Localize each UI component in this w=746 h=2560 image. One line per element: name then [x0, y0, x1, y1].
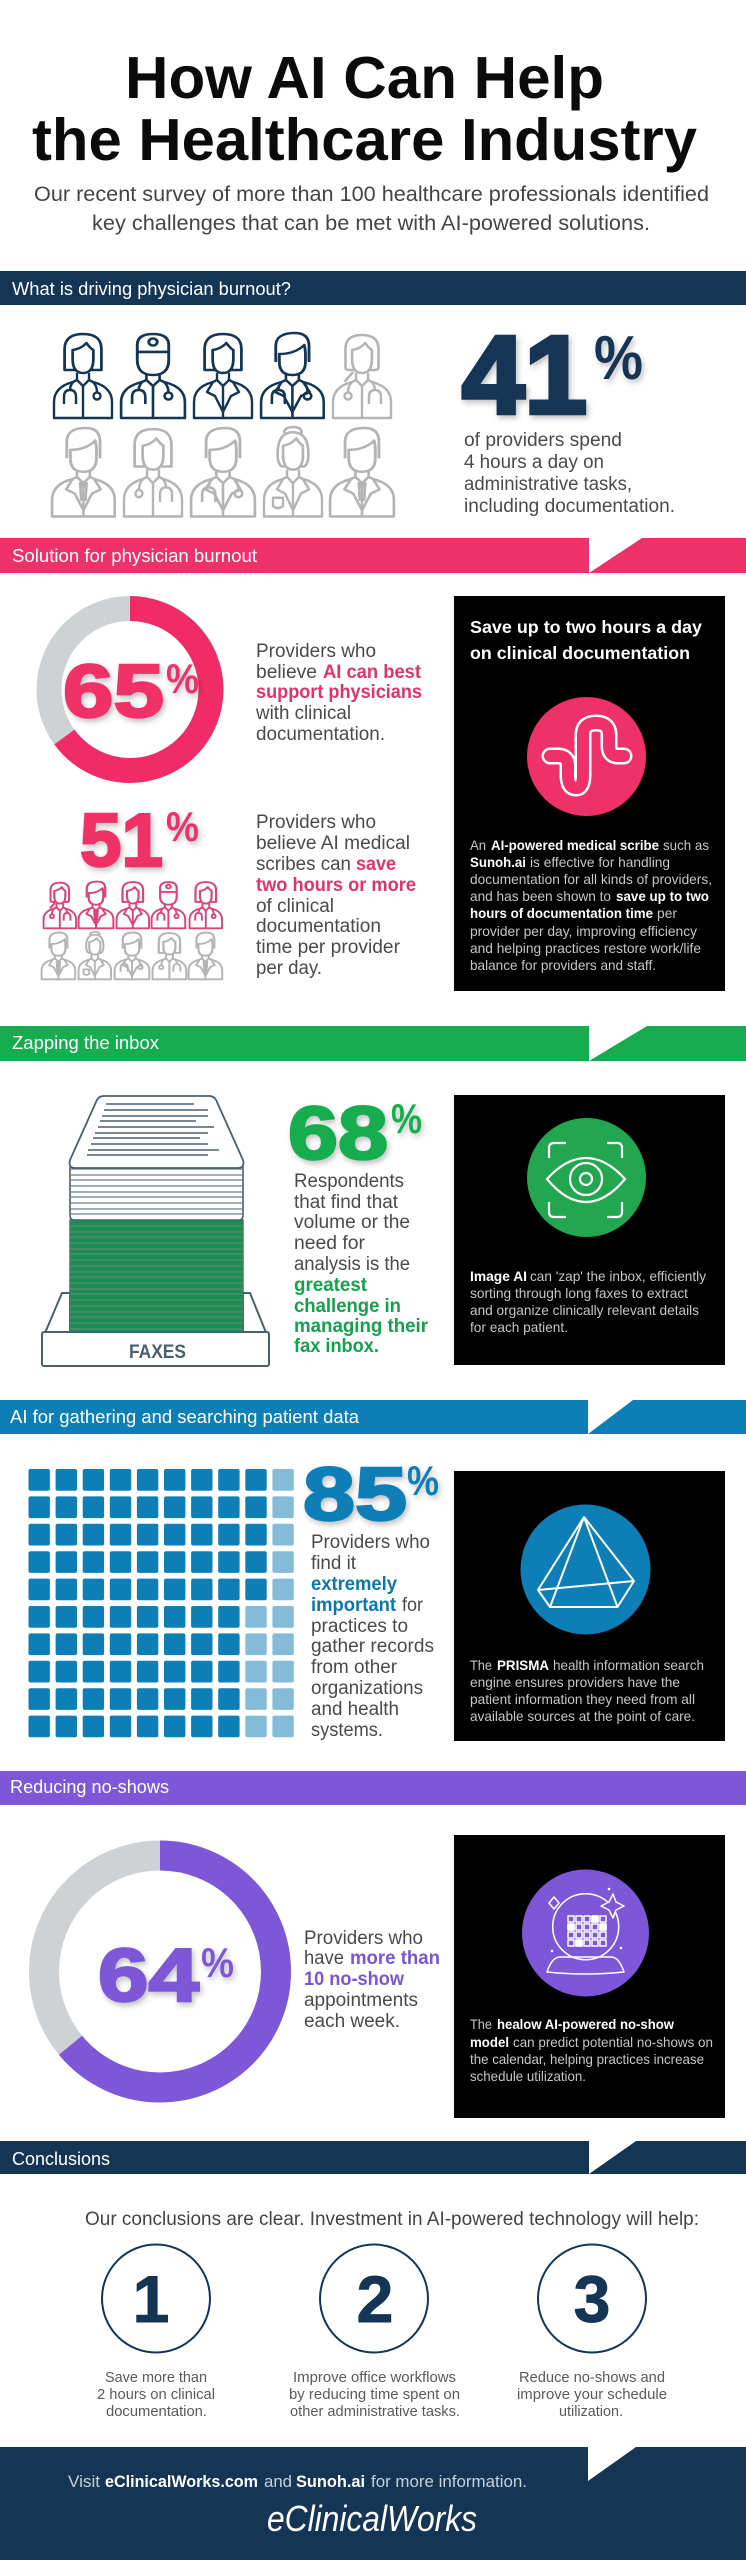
footer: [0, 2447, 746, 2560]
text: 65% description: [255, 641, 422, 745]
text: 85% description: from other: [311, 1657, 398, 1678]
callout body text: is effective for handling: [530, 855, 670, 870]
heading band: zapping: [0, 1026, 746, 1061]
stat: 64%: [98, 1933, 234, 2017]
heading band: burnout: [0, 271, 746, 305]
callout body text: model: [470, 2035, 509, 2050]
icon: Sunoh wave: [527, 697, 646, 816]
text: 85% description: extremely: [311, 1574, 397, 1595]
stat: 64%: 64: [98, 1933, 199, 2017]
text: 51% description: per day.: [256, 958, 322, 979]
panel: gathering and searching patient data: [0, 1400, 746, 1741]
text: 51% description: time per provider: [256, 937, 401, 958]
donut chart: 65%: [49, 608, 211, 770]
stat: 51%: %: [166, 803, 199, 850]
label: FAXES: FAXES: [129, 1342, 186, 1363]
stat: 85%: 85: [303, 1452, 407, 1536]
callout body text: An: [470, 838, 486, 853]
text: 85% description: find it: [311, 1553, 357, 1574]
title: [32, 45, 697, 173]
callout heading: [470, 617, 702, 663]
text: 85% description: important: [311, 1595, 397, 1616]
footer link text: for more information.: [371, 2472, 527, 2491]
panel: conclusions: [0, 2141, 746, 2420]
title: How AI Can Help: [125, 45, 604, 111]
item 3: reduce no-shows: utilization.: [559, 2404, 623, 2420]
text: 65% description: believe: [256, 662, 317, 683]
callout body text: [470, 2017, 713, 2084]
callout body text: for each patient.: [470, 1320, 568, 1335]
text: 51% description: documentation: [256, 916, 381, 937]
text: 41% description: of providers spend: [464, 430, 622, 451]
subtitle: Our recent survey of more than 100 healthcare professionals identified: [34, 182, 709, 206]
panel: solution for burnout: [0, 538, 746, 991]
stat: 64%: %: [201, 1939, 234, 1986]
text: 64% description: [304, 1928, 440, 2032]
callout body text: Sunoh.ai: [470, 855, 526, 870]
stat: 68%: %: [391, 1095, 422, 1142]
heading band: patient data: AI for gathering and searching patient data: [10, 1407, 360, 1427]
text: 41% description: 4 hours a day on: [464, 452, 604, 473]
text: 41% description: [464, 430, 675, 517]
callout body text: per: [657, 906, 677, 921]
text: 68% description: managing their: [294, 1316, 429, 1337]
item 1: save time: Save more than: [105, 2370, 207, 2386]
icon: grid of ten physicians, four highlighted: [52, 333, 394, 516]
text: 64% description: each week.: [304, 2011, 400, 2032]
callout body text: can 'zap' the inbox, efficiently: [530, 1269, 706, 1284]
donut chart: 64%: [44, 1856, 276, 2088]
callout body text: documentation for all kinds of providers,: [470, 872, 712, 887]
item 3: reduce no-shows: Reduce no-shows and: [519, 2370, 665, 2386]
callout body text: such as: [663, 838, 709, 853]
footer link text: Visit: [68, 2472, 100, 2491]
text: 51% description: [256, 812, 416, 979]
heading band: no-shows: Reducing no-shows: [10, 1777, 169, 1797]
panel: reducing no-shows: [0, 1771, 746, 2118]
callout body text: engine ensures providers have the: [470, 1675, 680, 1690]
callout body text: The: [470, 1658, 492, 1673]
text: 85% description: systems.: [311, 1720, 383, 1741]
text: 68% description: volume or the: [294, 1212, 410, 1233]
stat: 41%: [462, 314, 643, 437]
callout body text: can predict potential no-shows on: [513, 2035, 713, 2050]
text: 65% description: AI can best: [323, 662, 422, 683]
title: the Healthcare Industry: [32, 107, 697, 173]
panel: black callout, PRISMA: [454, 1471, 725, 1741]
callout body text: [470, 1658, 704, 1724]
text: 85% description: gather records: [311, 1636, 434, 1657]
text: 51% description: of clinical: [256, 896, 334, 917]
text: 68% description: need for: [294, 1233, 366, 1254]
callout body text: and has been shown to: [470, 889, 611, 904]
stat: 68%: [288, 1091, 422, 1175]
text: 68% description: analysis is the: [294, 1254, 410, 1275]
callout body text: sorting through long faxes to extract: [470, 1286, 688, 1301]
panel: black callout, Image AI: [454, 1095, 725, 1365]
footer link text: Sunoh.ai: [296, 2472, 365, 2491]
callout heading: Save up to two hours a day: [470, 617, 702, 637]
callout body text: The: [470, 2017, 492, 2032]
heading band: patient data: [0, 1400, 746, 1434]
footer link text: eClinicalWorks.com: [105, 2472, 258, 2491]
panel: black callout, healow: [454, 1835, 725, 2118]
item 3: reduce no-shows: [517, 2244, 667, 2420]
callout body text: provider per day, improving efficiency: [470, 924, 697, 939]
logo: eClinicalWorks: eClinicalWorks: [267, 2498, 477, 2539]
heading band: zapping: Zapping the inbox: [12, 1033, 159, 1053]
stat: 65%: 65: [63, 649, 164, 733]
item 2: improve workflows: Improve office workflows: [293, 2370, 456, 2386]
item 1: save time: [97, 2244, 215, 2420]
panel: zapping the inbox: [0, 1026, 746, 1366]
callout body text: save up to two: [616, 889, 709, 904]
callout body text: patient information they need from all: [470, 1692, 695, 1707]
icon: fax tray with stacked pages: [42, 1096, 269, 1366]
callout body text: balance for providers and staff.: [470, 958, 656, 973]
text: 68% description: challenge in: [294, 1296, 401, 1317]
item 2: improve workflows: by reducing time spent on: [289, 2387, 460, 2403]
callout body text: [470, 838, 712, 973]
stat: 85%: [303, 1452, 439, 1536]
text: 51% description: save: [356, 854, 396, 875]
text: 64% description: more than: [350, 1948, 440, 1969]
text: 68% description: fax inbox.: [294, 1336, 379, 1357]
callout body text: health information search: [553, 1658, 704, 1673]
item 1: save time: 1: [133, 2262, 169, 2336]
callout body text: [470, 1269, 706, 1335]
text: 41% description: administrative tasks,: [464, 474, 632, 495]
text: 64% description: 10 no-show: [304, 1969, 404, 1990]
text: 68% description: [294, 1171, 429, 1357]
text: 64% description: have: [304, 1948, 344, 1969]
text: 68% description: that find that: [294, 1192, 399, 1213]
heading band: conclusions: [0, 2141, 746, 2174]
callout body text: AI-powered medical scribe: [491, 838, 659, 853]
icon: grid of ten physicians, five highlighted: [42, 882, 222, 979]
panel: black callout, clinical documentation: [454, 596, 725, 991]
stat: 85%: %: [407, 1457, 439, 1504]
icon: eye scan: [527, 1118, 646, 1237]
callout body text: and organize clinically relevant details: [470, 1303, 699, 1318]
callout body text: hours of documentation time: [470, 906, 653, 921]
icon: crystal ball calendar: [522, 1870, 649, 1996]
item 2: improve workflows: [289, 2244, 460, 2420]
callout body text: the calendar, helping practices increase: [470, 2052, 704, 2067]
callout heading: on clinical documentation: [470, 643, 690, 663]
text: 65% description: Providers who: [256, 641, 376, 662]
callout body text: Image AI: [470, 1269, 527, 1284]
item 1: save time: documentation.: [106, 2404, 207, 2420]
subtitle: key challenges that can be met with AI-powered solutions.: [92, 211, 650, 235]
text: conclusions intro: Our conclusions are clear. Investment in AI-powered technology will help:: [85, 2208, 699, 2230]
stat: 51%: 51: [80, 798, 163, 882]
text: 85% description: Providers who: [311, 1532, 430, 1553]
text: 68% description: greatest: [294, 1275, 368, 1296]
stat: 41%: 41: [462, 314, 587, 437]
text: 65% description: with clinical: [255, 703, 351, 724]
heading band: conclusions: Conclusions: [12, 2149, 110, 2169]
text: 65% description: documentation.: [256, 724, 385, 745]
subtitle: [34, 182, 709, 235]
text: 68% description: Respondents: [294, 1171, 404, 1192]
text: 51% description: believe AI medical: [256, 833, 410, 854]
text: 51% description: two hours or more: [256, 875, 416, 896]
heading band: solution: Solution for physician burnout: [12, 546, 257, 566]
callout body text: schedule utilization.: [470, 2069, 586, 2084]
footer link text: and: [264, 2472, 292, 2491]
callout body text: PRISMA: [497, 1658, 549, 1673]
text: 51% description: scribes can: [256, 854, 351, 875]
heading band: solution: [0, 538, 746, 573]
heading band: burnout: What is driving physician burnout?: [12, 279, 291, 299]
item 3: reduce no-shows: improve your schedule: [517, 2387, 667, 2403]
item 2: improve workflows: 2: [357, 2262, 393, 2336]
item 1: save time: 2 hours on clinical: [97, 2387, 215, 2403]
text: 51% description: Providers who: [256, 812, 376, 833]
stat: 65%: [63, 649, 199, 733]
footer link text: [68, 2472, 527, 2491]
text: 85% description: practices to: [311, 1616, 408, 1637]
text: 64% description: Providers who: [304, 1928, 423, 1949]
text: 85% description: for: [402, 1595, 424, 1616]
text: 64% description: appointments: [304, 1990, 418, 2011]
heading band: no-shows: [0, 1771, 746, 1805]
stat: 65%: %: [166, 655, 199, 702]
stat: 41%: %: [594, 324, 643, 393]
text: 65% description: support physicians: [256, 682, 422, 703]
icon: prism: [520, 1504, 650, 1634]
item 2: improve workflows: other administrative tasks.: [290, 2404, 460, 2420]
callout body text: healow AI-powered no-show: [497, 2017, 674, 2032]
panel: physician burnout drivers: [0, 271, 746, 517]
callout body text: and helping practices restore work/life: [470, 941, 701, 956]
text: 85% description: organizations: [311, 1678, 423, 1699]
text: 85% description: [311, 1532, 434, 1741]
text: 85% description: and health: [311, 1699, 399, 1720]
text: 41% description: including documentation.: [464, 496, 675, 517]
callout body text: available sources at the point of care.: [470, 1709, 695, 1724]
chart: waffle grid 85 of 100: [28, 1469, 294, 1737]
stat: 68%: 68: [288, 1091, 388, 1175]
item 3: reduce no-shows: 3: [574, 2262, 610, 2336]
